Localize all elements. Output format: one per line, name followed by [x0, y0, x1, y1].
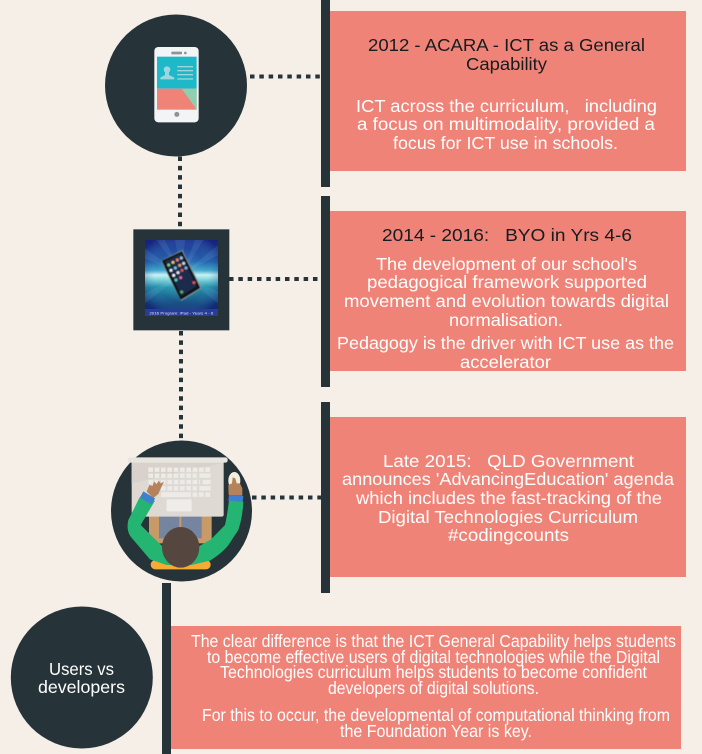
icon: tablet picture in dark frame: 2016 Program: iPad - Years 4 - 6 [149, 310, 214, 315]
text block: ICT across the curriculum: focus for ICT use in schools. [393, 133, 618, 153]
text block: pedagogical framework: The development of our school's [376, 254, 637, 274]
dotted connector: phone to bar [250, 74, 321, 78]
text block: Advancing Education: Late 2015: QLD Government [383, 451, 634, 471]
text block: ICT across the curriculum [356, 96, 657, 153]
text block: pedagogical framework: movement and evolution towards digital [344, 291, 669, 311]
panel: users vs developers text box [171, 626, 681, 749]
panel: 2012 ACARA text box [330, 11, 686, 171]
arms and torso [128, 497, 243, 565]
label: users vs developers [38, 659, 125, 697]
text block: pedagogical framework: accelerator [460, 352, 551, 372]
heading: 2012 ACARA: Capability [466, 54, 547, 74]
label: users vs developers: Users vs [49, 659, 114, 679]
dotted connector: tablet to laptop [179, 331, 183, 441]
text block: clear difference: to become effective users of digital technologies while the Digital [207, 647, 660, 667]
heading: 2012 ACARA: 2012 - ACARA - ICT as a General [368, 35, 645, 55]
timeline bars [162, 0, 330, 754]
icon: person at laptop in circle [111, 440, 252, 582]
icon: smartphone in circle [105, 14, 247, 156]
text block: pedagogical framework: Pedagogy is the driver with ICT use as the [337, 333, 674, 353]
text block: pedagogical framework [337, 254, 674, 372]
icon: users vs developers circle [11, 606, 153, 748]
text block: pedagogical framework: pedagogical framework supported [367, 272, 647, 292]
text block: Advancing Education: announces 'AdvancingEducation' agenda [342, 469, 674, 489]
text block: ICT across the curriculum: a focus on multimodality, provided a [357, 114, 655, 134]
label: users vs developers: developers [38, 677, 125, 697]
dotted connector: laptop to bar [252, 496, 321, 500]
text block: clear difference [191, 631, 676, 741]
text block: Advancing Education: which includes the fast-tracking of the [355, 488, 662, 508]
panel: 2014-2016 BYO text box [330, 211, 686, 372]
text block: clear difference: Technologies curriculum helps students to become confident [220, 662, 647, 682]
dotted connector: tablet to bar [229, 277, 321, 281]
text block: Advancing Education: Digital Technologies Curriculum [378, 507, 638, 527]
text block: pedagogical framework: normalisation. [449, 310, 563, 330]
text block: clear difference: developers of digital solutions. [328, 678, 539, 698]
text block: ICT across the curriculum: ICT across the curriculum, including [356, 96, 657, 116]
text block: Advancing Education: #codingcounts [448, 525, 569, 545]
heading: BYO in Yrs 4-6: 2014 - 2016: BYO in Yrs 4-6 [382, 225, 632, 245]
text block: clear difference: the Foundation Year is key. [340, 721, 532, 741]
panel: Late 2015 text box [330, 417, 686, 577]
text block: Advancing Education [342, 451, 674, 545]
icon: tablet picture in dark frame [133, 229, 229, 330]
heading: 2012 ACARA [368, 35, 645, 74]
dotted connector: phone to tablet [178, 156, 182, 229]
